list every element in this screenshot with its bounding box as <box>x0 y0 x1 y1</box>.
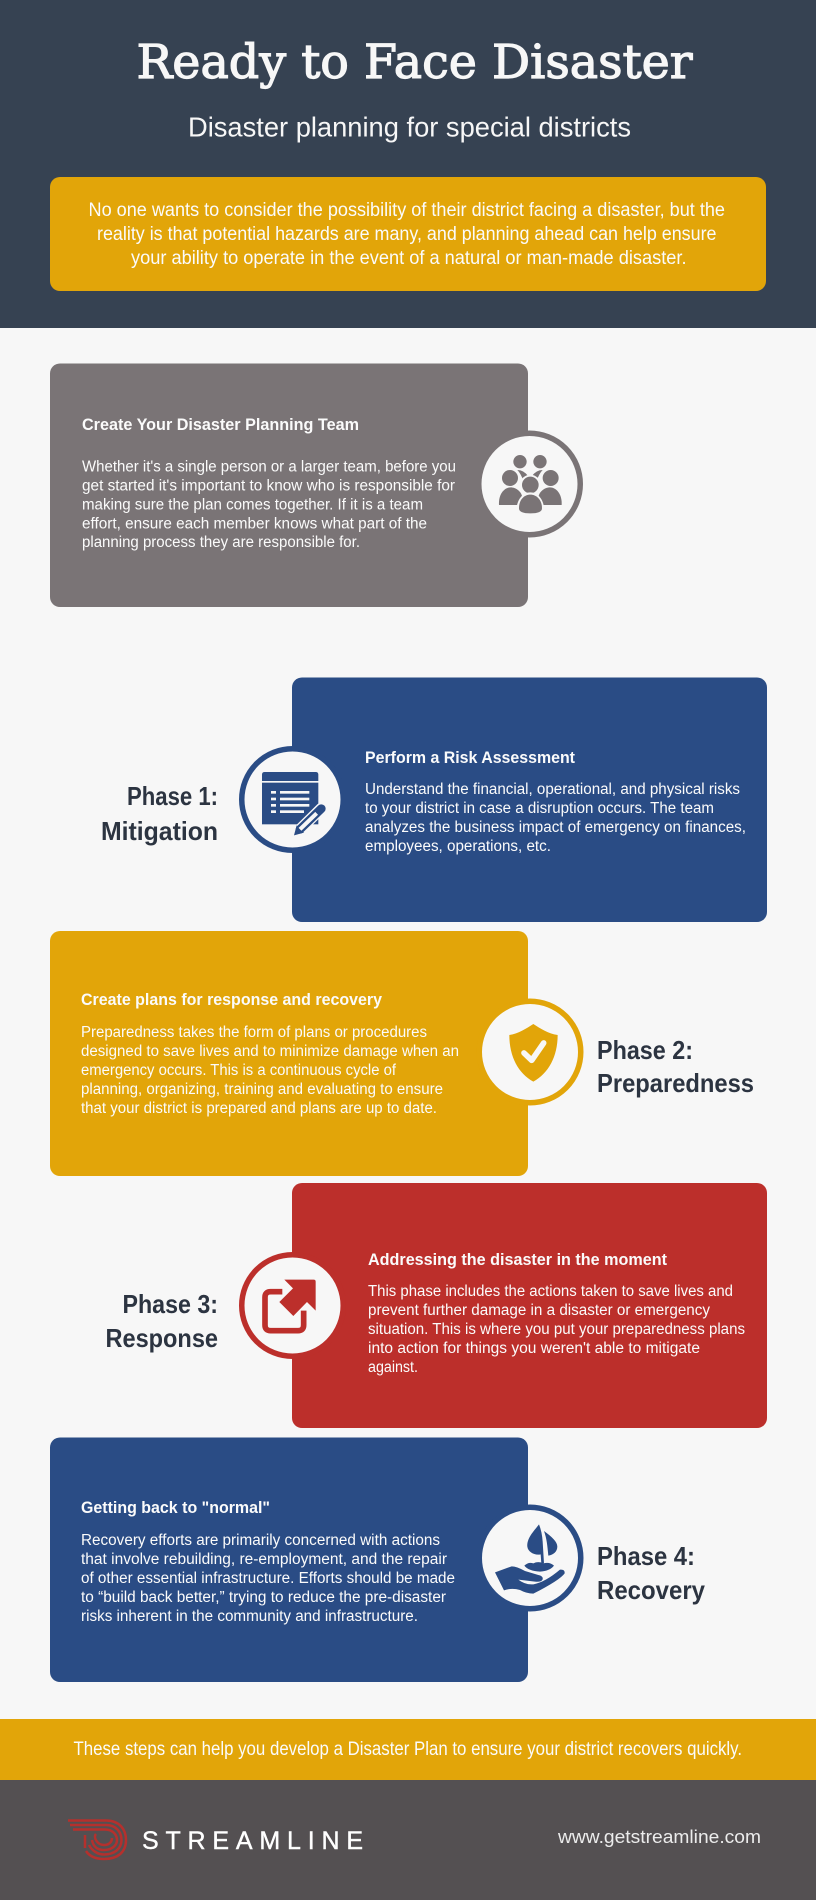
intro callout <box>50 177 766 291</box>
phase label <box>106 1289 218 1353</box>
panel body text <box>81 1024 459 1117</box>
panel body text: to your district in case a disruption occurs. The team <box>365 800 714 817</box>
panel body text: emergency occurs. This is a continuous cycle of <box>81 1062 397 1079</box>
intro callout: No one wants to consider the possibility of their district facing a disaster, but the <box>88 200 725 221</box>
panel heading: Create plans for response and recovery <box>81 991 383 1009</box>
panel heading: Getting back to "normal" <box>81 1499 270 1517</box>
panel body text: get started it's important to know who is responsible for <box>82 478 455 494</box>
phase label <box>101 781 218 846</box>
panel body text: Recovery efforts are primarily concerned with actions <box>81 1532 440 1549</box>
panel body text: that involve rebuilding, re-employment, and the repair <box>81 1551 447 1568</box>
phase label: Phase 3: <box>122 1289 218 1319</box>
panel body text: Whether it's a single person or a larger team, before you <box>82 458 456 476</box>
panel body text <box>82 458 456 551</box>
panel body text: Understand the financial, operational, and physical risks <box>365 781 740 798</box>
panel body text: risks inherent in the community and infrastructure. <box>81 1608 418 1625</box>
panel body text: effort, ensure each member knows what part of the <box>82 516 427 532</box>
intro callout: your ability to operate in the event of a natural or man-made disaster. <box>131 248 686 269</box>
logo wordmark: STREAMLINE <box>142 1827 363 1855</box>
title: Ready to Face Disaster <box>136 35 693 90</box>
panel heading: Perform a Risk Assessment <box>365 749 575 767</box>
panel body text: against. <box>368 1359 418 1376</box>
icon: shield with check <box>479 1001 581 1103</box>
panel body text: analyzes the business impact of emergency on finances, <box>365 819 746 836</box>
panel: phase 3 response <box>106 1183 767 1428</box>
phase label: Recovery <box>597 1575 705 1605</box>
phase label: Phase 4: <box>597 1541 695 1571</box>
icon: share arrow <box>242 1255 343 1356</box>
phase label: Mitigation <box>101 816 218 846</box>
panel body text: making sure the plan comes together. If it is a team <box>82 496 423 514</box>
panel body text <box>368 1283 745 1376</box>
panel body text: Preparedness takes the form of plans or procedures <box>81 1024 427 1041</box>
panel body text: planning process they are responsible for. <box>82 534 360 551</box>
panel: phase 2 preparedness <box>50 931 754 1176</box>
panel body text: prevent further damage in a disaster or emergency <box>368 1302 710 1319</box>
panel body text <box>365 781 746 855</box>
phase label: Response <box>106 1323 218 1353</box>
icon: document with pencil <box>242 749 343 850</box>
website url: www.getstreamline.com <box>557 1827 761 1847</box>
phase label: Preparedness <box>597 1068 754 1098</box>
panel body text: employees, operations, etc. <box>365 838 551 855</box>
panel: phase 1 mitigation <box>101 678 767 922</box>
panel body text: situation. This is where you put your preparedness plans <box>368 1321 745 1338</box>
panel body text: that your district is prepared and plans are up to date. <box>81 1100 437 1117</box>
intro callout: reality is that potential hazards are many, and planning ahead can help ensure <box>97 224 716 245</box>
icon: hand holding plant <box>479 1507 581 1609</box>
icon: streamline logo <box>68 1820 126 1859</box>
panel body text: of other essential infrastructure. Efforts should be made <box>81 1570 455 1587</box>
panel body text: planning, organizing, training and evaluating to ensure <box>81 1081 443 1098</box>
panel heading: Addressing the disaster in the moment <box>368 1251 667 1269</box>
footer <box>0 1780 816 1900</box>
closing banner <box>0 1719 816 1780</box>
panel body text: designed to save lives and to minimize damage when an <box>81 1043 459 1060</box>
phase label <box>597 1541 705 1605</box>
phase label: Phase 1: <box>127 781 218 811</box>
phase label <box>597 1035 754 1098</box>
subtitle: Disaster planning for special districts <box>188 112 631 142</box>
panel body text: This phase includes the actions taken to save lives and <box>368 1283 733 1300</box>
panel: phase 4 recovery <box>50 1438 705 1682</box>
panel body text <box>81 1532 455 1625</box>
panel body text: into action for things you weren't able to mitigate <box>368 1340 700 1357</box>
panel: create your team <box>50 364 580 607</box>
panel heading: Create Your Disaster Planning Team <box>82 416 359 434</box>
icon: team <box>479 433 580 535</box>
panel body text: to “build back better,” trying to reduce the pre-disaster <box>81 1589 446 1606</box>
phase label: Phase 2: <box>597 1035 693 1065</box>
header band <box>0 0 816 328</box>
closing banner: These steps can help you develop a Disaster Plan to ensure your district recovers quickly. <box>74 1739 742 1760</box>
